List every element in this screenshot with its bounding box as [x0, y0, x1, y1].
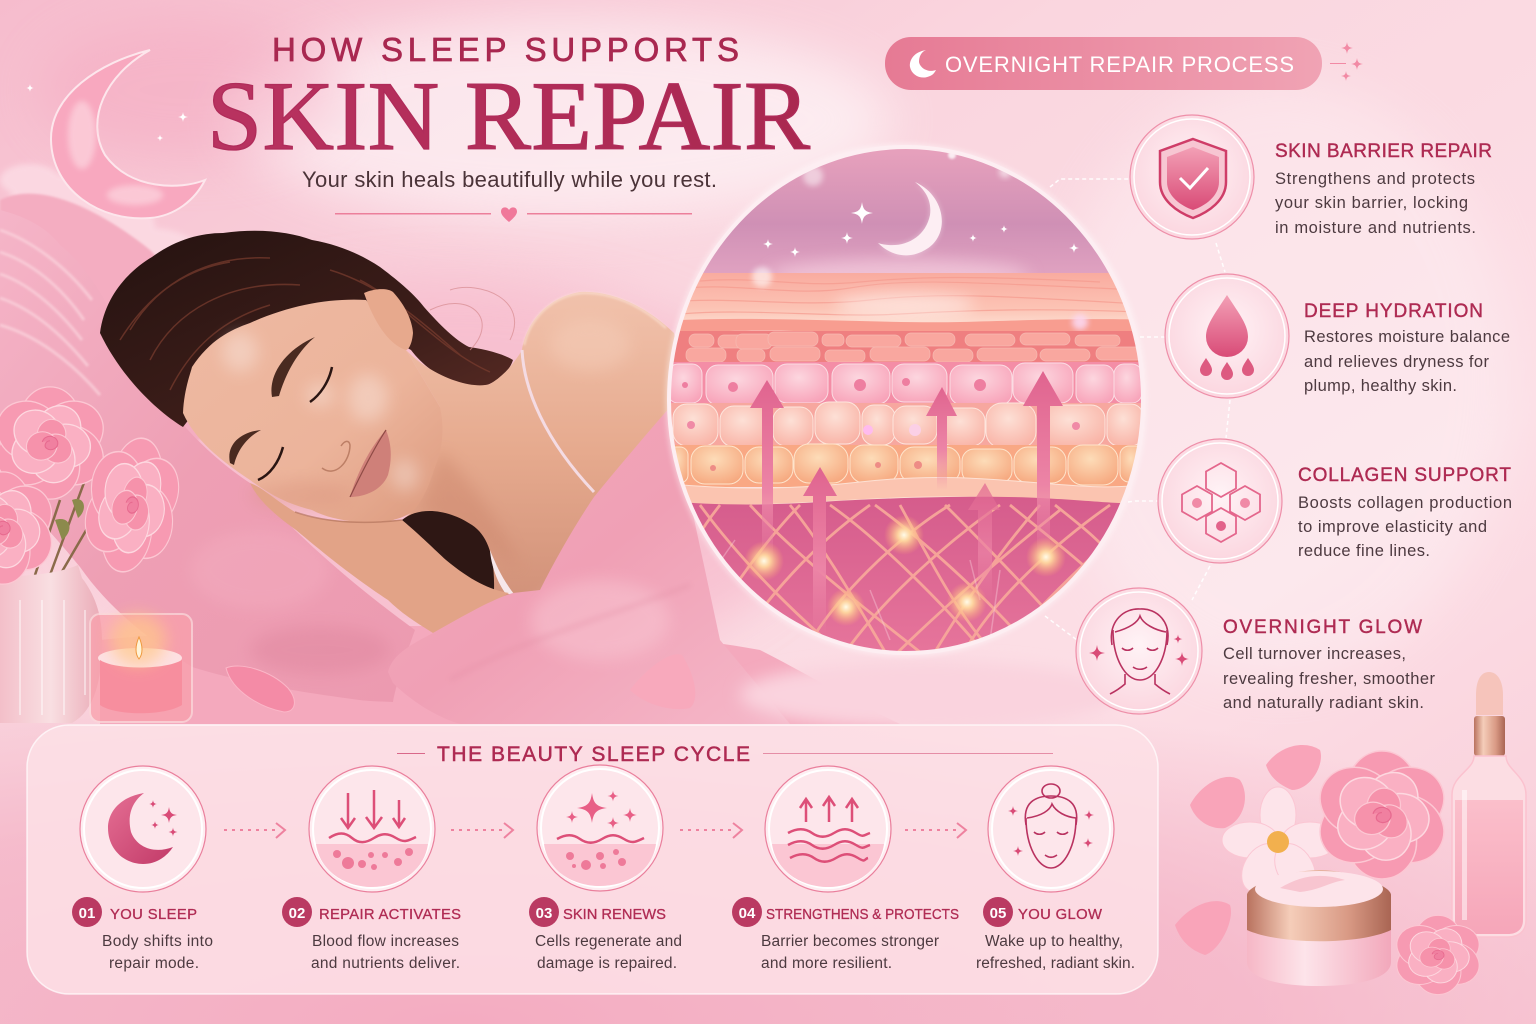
panel heading: THE BEAUTY SLEEP CYCLE	[437, 743, 750, 766]
shoulder and neck	[402, 292, 700, 610]
eyebrow upper	[271, 337, 315, 397]
pill: overnight repair process	[885, 37, 1322, 90]
step 3: skin renews: Cells regenerate and	[535, 933, 682, 950]
step 3: skin renews: SKIN RENEWS	[563, 907, 666, 923]
arrow 4 to 5	[905, 823, 966, 838]
icon: glowing woman face	[988, 766, 1114, 892]
feature: skin barrier repair: SKIN BARRIER REPAIR	[1275, 141, 1492, 162]
title: how sleep supports: HOW SLEEP SUPPORTS	[272, 31, 739, 68]
nose	[322, 441, 350, 471]
step 5: you glow	[976, 766, 1135, 972]
step 1: you sleep: YOU SLEEP	[110, 907, 197, 923]
ear	[364, 289, 413, 350]
step 4: strengthens and protects: STRENGTHENS & PROTECTS	[766, 907, 959, 923]
lower cell row	[660, 444, 1160, 487]
feature: overnight glow: OVERNIGHT GLOW	[1223, 617, 1422, 638]
feature: collagen support: reduce fine lines.	[1298, 542, 1430, 560]
feature: skin barrier repair: your skin barrier, locking	[1275, 194, 1468, 212]
step 5: you glow: refreshed, radiant skin.	[976, 955, 1135, 972]
rose blooms	[0, 387, 114, 499]
upward arrows	[750, 371, 1063, 636]
front pillow	[0, 210, 415, 702]
step 4: strengthens and protects: 04	[739, 905, 756, 922]
feature: deep hydration: plump, healthy skin.	[1304, 377, 1457, 395]
pill: overnight repair process: OVERNIGHT REPAIR PROCESS	[945, 52, 1294, 77]
feature: deep hydration: DEEP HYDRATION	[1304, 301, 1483, 322]
step 2: repair activates: Blood flow increases	[312, 933, 459, 950]
feature: skin barrier repair: in moisture and nutrients.	[1275, 219, 1476, 237]
bedding foreground	[160, 668, 460, 724]
step 1: you sleep: Body shifts into	[102, 933, 213, 950]
step 5: you glow: 05	[990, 905, 1006, 922]
icon: petal	[226, 666, 294, 712]
icon: glowing crescent moon	[26, 50, 205, 218]
icon: sparkles over skin	[537, 765, 663, 891]
basal band	[684, 477, 1127, 504]
mist over bed right side	[740, 661, 1120, 729]
feature: collagen support	[1158, 439, 1512, 563]
lips	[350, 430, 391, 497]
feature: deep hydration	[1165, 274, 1510, 398]
roses and vase	[0, 387, 196, 723]
glowing nodes	[744, 515, 1066, 626]
feature: overnight glow: Cell turnover increases,	[1223, 645, 1406, 663]
closed eye lashes upper	[310, 367, 332, 402]
step 5: you glow: Wake up to healthy,	[985, 933, 1123, 950]
step 5: you glow: YOU GLOW	[1018, 907, 1102, 923]
feature: collagen support: Boosts collagen production	[1298, 494, 1512, 512]
flattened cells layer	[674, 331, 1138, 362]
step 2: repair activates	[282, 766, 461, 972]
candle in glass	[90, 614, 192, 722]
feature: overnight glow: revealing fresher, smoother	[1223, 670, 1436, 688]
feature: skin barrier repair	[1130, 115, 1492, 239]
icon: pill moon	[910, 50, 936, 78]
icon: arrows into skin	[309, 766, 435, 892]
serum bottle	[1452, 672, 1526, 937]
feature: collagen support: COLLAGEN SUPPORT	[1298, 465, 1511, 486]
feature: overnight glow	[1076, 588, 1436, 714]
strap	[522, 350, 594, 492]
middle cell row	[671, 402, 1141, 445]
icon: water drops	[1165, 274, 1289, 398]
feature: overnight glow: and naturally radiant skin.	[1223, 694, 1424, 712]
hair	[100, 231, 513, 427]
feature: skin barrier repair: Strengthens and protects	[1275, 170, 1475, 188]
sparkles beside pill	[1330, 42, 1363, 81]
upper cell row	[671, 362, 1141, 403]
stems	[35, 480, 95, 575]
icon: arrows rising from skin	[765, 766, 891, 892]
connector lines between icons	[1045, 179, 1230, 640]
back pillow	[0, 194, 250, 470]
vase	[0, 565, 102, 723]
clouds behind the moon	[0, 164, 205, 292]
closed eye lashes lower	[258, 447, 283, 480]
icon: moon and stars	[80, 766, 206, 892]
arrow 1 to 2	[224, 823, 285, 838]
skincare products and flowers	[1175, 672, 1526, 995]
white top	[490, 550, 514, 594]
cream jar	[1247, 870, 1391, 986]
step 2: repair activates: REPAIR ACTIVATES	[319, 907, 461, 923]
step 3: skin renews	[529, 765, 682, 972]
icon: petal on blanket	[630, 654, 695, 709]
large rose	[1307, 751, 1457, 879]
night sky layer	[703, 149, 1109, 273]
panel: the beauty sleep cycle	[27, 725, 1158, 994]
icon: glowing face	[1076, 588, 1202, 714]
arrow 2 to 3	[451, 823, 513, 838]
hand and arm	[250, 483, 509, 633]
title: skin repair: SKIN REPAIR	[207, 62, 810, 171]
bed sheet	[100, 626, 900, 724]
divider with heart	[335, 207, 692, 222]
step 1: you sleep: repair mode.	[109, 955, 199, 972]
feature: deep hydration: Restores moisture balance	[1304, 328, 1510, 346]
face highlights	[222, 332, 419, 491]
hair under the chin	[402, 511, 494, 590]
stratum corneum	[680, 264, 1132, 331]
feature: collagen support: to improve elasticity and	[1298, 518, 1487, 536]
eyebrow lower	[229, 430, 261, 465]
icon: collagen hexagons	[1158, 439, 1282, 563]
skin cross-section circle	[660, 140, 1160, 660]
icon: moon in sky	[878, 182, 942, 255]
step 3: skin renews: 03	[536, 905, 552, 922]
dermis	[692, 496, 1120, 651]
icon: shield	[1130, 115, 1254, 239]
step 2: repair activates: 02	[289, 905, 305, 922]
step 1: you sleep: 01	[79, 905, 95, 922]
subtitle: Your skin heals beautifully while you rest.	[302, 167, 717, 192]
blanket	[388, 407, 790, 724]
white flower	[1222, 787, 1338, 900]
arrow 3 to 4	[680, 823, 742, 838]
pink flower	[1388, 915, 1488, 995]
step 2: repair activates: and nutrients deliver.	[311, 955, 460, 972]
step 1: you sleep	[72, 766, 213, 972]
face	[183, 300, 442, 523]
step 4: strengthens and protects: and more resilient.	[761, 955, 892, 972]
step 4: strengthens and protects: Barrier becomes stronger	[761, 933, 939, 950]
sleeping woman scene	[0, 194, 900, 724]
petals	[1175, 745, 1321, 955]
step 3: skin renews: damage is repaired.	[537, 955, 677, 972]
feature: deep hydration: and relieves dryness for	[1304, 353, 1490, 371]
step 4: strengthens and protects	[732, 766, 959, 972]
